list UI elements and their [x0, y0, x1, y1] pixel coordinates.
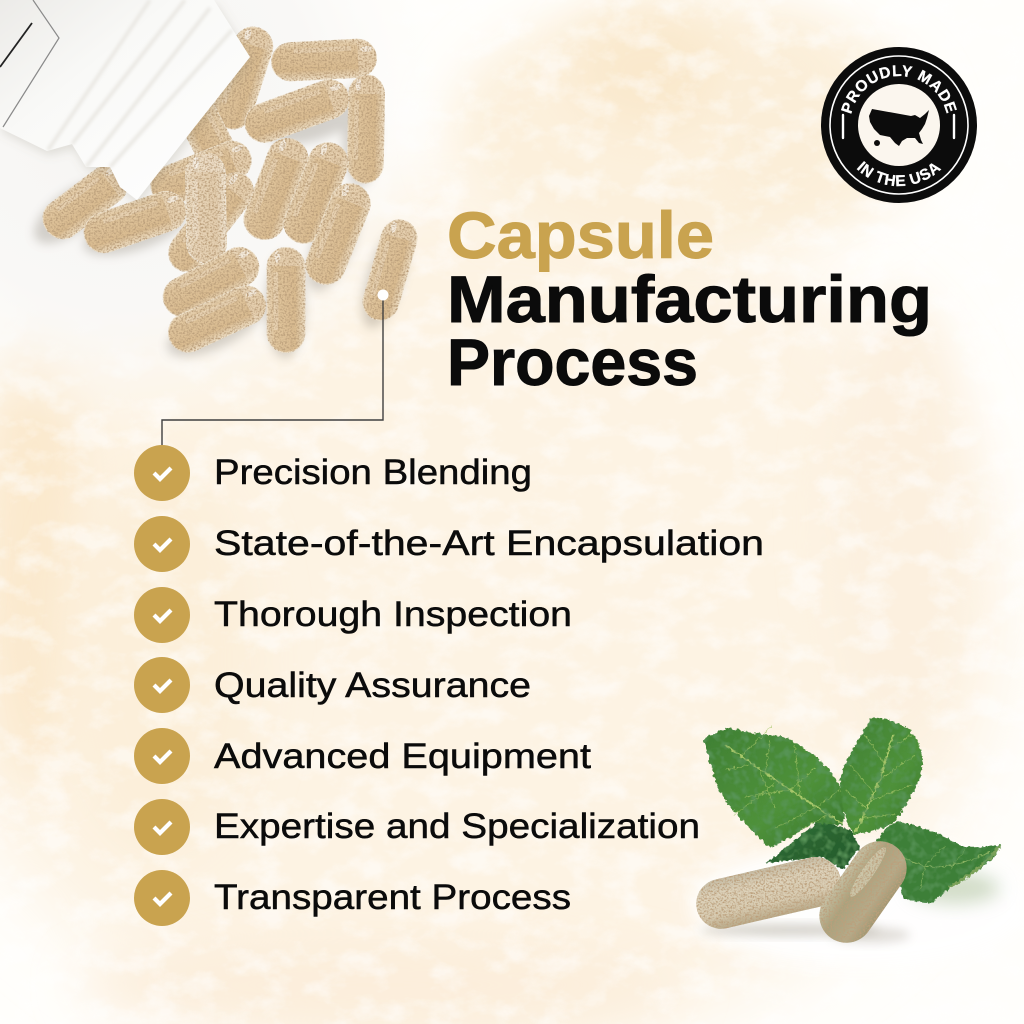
- capsules: [36, 22, 421, 358]
- item: Advanced Equipment: Advanced Equipment: [214, 737, 591, 776]
- item: Quality Assurance: Quality Assurance: [214, 666, 531, 705]
- capsule shadows: [24, 81, 417, 368]
- leaf right: [870, 822, 1001, 903]
- leaf bottom dark: [765, 820, 860, 870]
- leaf left: [703, 726, 845, 848]
- badge text bottom: IN THE USA: [856, 161, 942, 186]
- item: Precision Blending: [134, 445, 532, 501]
- capsule right: [809, 831, 917, 953]
- USA map icon: [869, 109, 929, 146]
- shadow: [910, 872, 1000, 904]
- mint leaves and capsules photo: [690, 718, 1024, 967]
- item: State-of-the-Art Encapsulation: State-of-the-Art Encapsulation: [214, 524, 764, 563]
- title line 2: Manufacturing: [447, 262, 932, 336]
- item: Thorough Inspection: [134, 587, 572, 643]
- capsule pile photo: [0, 0, 421, 368]
- capsule left: [691, 852, 846, 934]
- item: Expertise and Specialization: Expertise and Specialization: [214, 807, 700, 846]
- item: Quality Assurance: [134, 657, 531, 713]
- connector line with dot: [162, 290, 388, 445]
- badge: proudly made in the USA: [821, 47, 977, 203]
- item: State-of-the-Art Encapsulation: [134, 516, 764, 572]
- item: Precision Blending: Precision Blending: [214, 453, 532, 492]
- title line 1: Capsule: [447, 198, 714, 272]
- item: Transparent Process: [134, 870, 571, 926]
- item: Advanced Equipment: [134, 728, 591, 784]
- title: [447, 198, 932, 399]
- title line 3: Process: [447, 325, 698, 399]
- item: Transparent Process: Transparent Process: [214, 878, 571, 917]
- item: Thorough Inspection: Thorough Inspection: [214, 595, 572, 634]
- checklist: [134, 445, 764, 926]
- white glow behind photo: [690, 843, 1024, 967]
- item: Expertise and Specialization: [134, 799, 700, 855]
- badge text top: PROUDLY MADE: [840, 65, 957, 114]
- bottle: [0, 0, 250, 200]
- leaf top right: [840, 718, 923, 835]
